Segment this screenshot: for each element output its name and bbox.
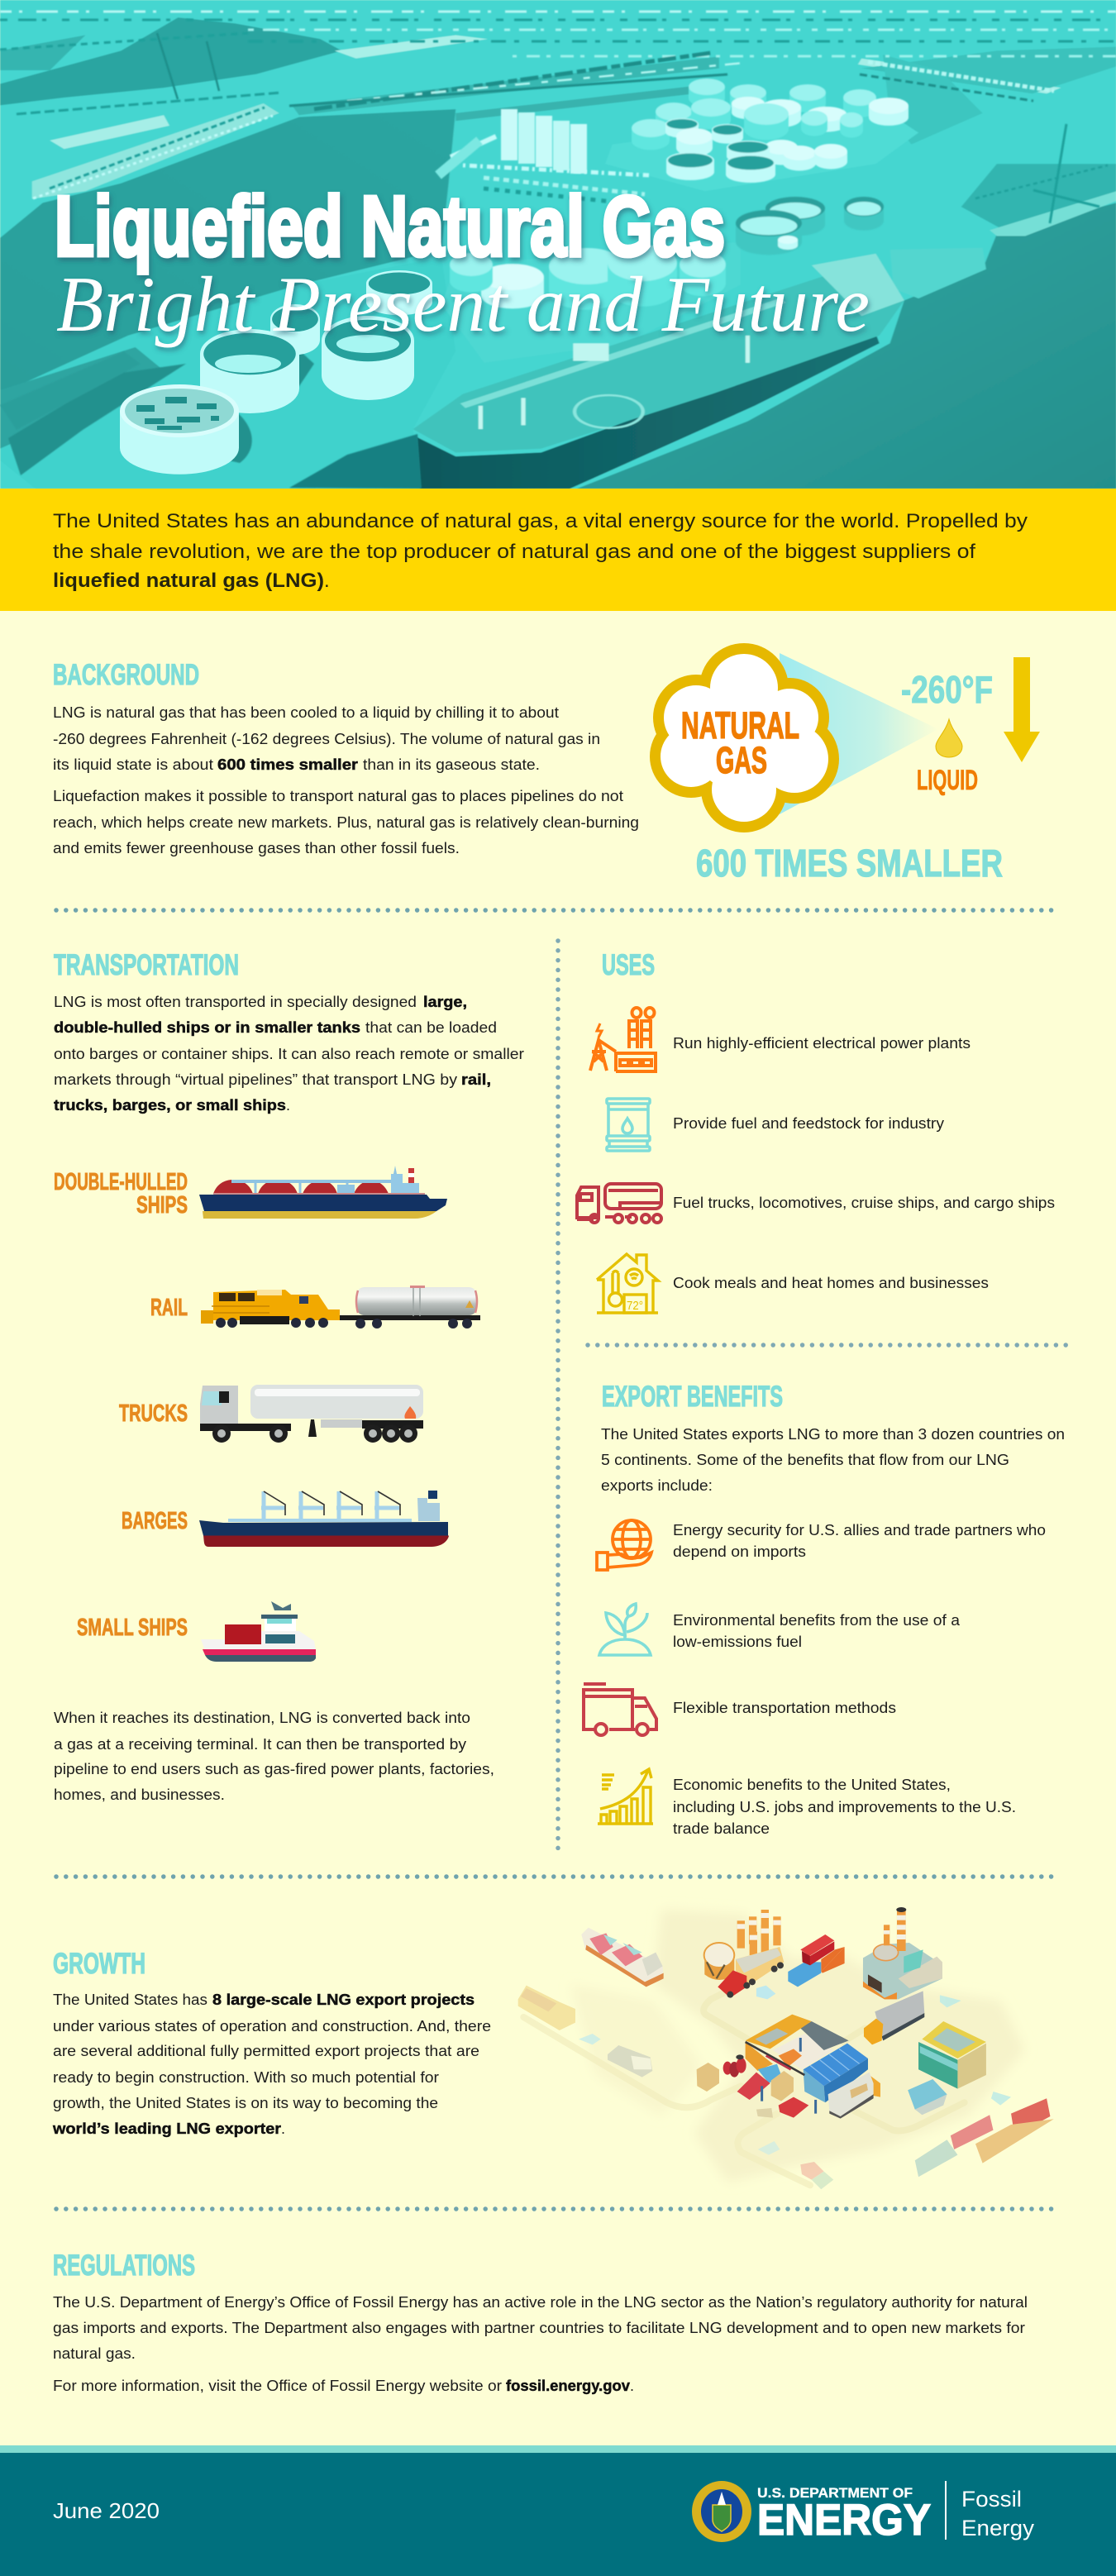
icon: locomotive with tank car — [201, 1286, 480, 1329]
icon: house with thermostat — [597, 1254, 658, 1313]
intro text: . — [324, 570, 330, 592]
growth text: ready to begin construction. With so much potential for — [53, 2069, 439, 2086]
export item text 2: low-emissions fuel — [673, 1634, 802, 1650]
footer — [0, 2445, 1116, 2576]
label: trucks: TRUCKS — [119, 1400, 188, 1427]
transportation text: trucks, barges, or small ships — [54, 1097, 286, 1114]
ice patches right — [940, 1995, 1011, 2106]
transportation text: large, — [423, 994, 467, 1010]
heading: transportation: TRANSPORTATION — [54, 949, 239, 981]
export item text 4: trade balance — [673, 1820, 770, 1837]
transportation text: markets through “virtual pipelines” that transport LNG by — [54, 1071, 457, 1088]
600 times smaller: 600 TIMES SMALLER — [696, 842, 1003, 885]
aerial photo: silos — [501, 109, 587, 174]
pale red truck — [800, 2162, 833, 2189]
subtitle: Bright Present and Future — [56, 260, 870, 348]
transportation text: onto barges or container ships. It can also reach remote or smaller — [54, 1046, 524, 1062]
gas carrier — [581, 1928, 664, 1987]
regulations text: The U.S. Department of Energy’s Office of Fossil Energy has an active role in the LNG sector as the Nation’s regulatory authority for natural — [53, 2294, 1028, 2311]
cloud: natural gas: GAS — [716, 739, 767, 781]
export item text 4 — [673, 1777, 1016, 1837]
aerial photo: shadows — [0, 347, 422, 489]
export intro text — [601, 1426, 1065, 1494]
ice patches — [579, 1986, 780, 2155]
hero: aerial photo of LNG terminal with title — [0, 0, 1116, 489]
growth text: . — [281, 2120, 285, 2137]
aerial photo: land, water, docks — [0, 0, 1116, 489]
grey box truck — [864, 1991, 924, 2044]
background text: reach, which helps create new markets. Plus, natural gas is relatively clean-burning — [53, 814, 639, 831]
export item text 4: including U.S. jobs and improvements to the U.S. — [673, 1799, 1016, 1815]
panel: uses — [577, 949, 1055, 1313]
train — [915, 2098, 1054, 2177]
cloud: natural gas — [650, 643, 839, 832]
export item text 1: Energy security for U.S. allies and trade partners who — [673, 1522, 1046, 1538]
intro text: the shale revolution, we are the top producer of natural gas and one of the biggest suppliers of — [53, 541, 975, 563]
aerial photo: storage tanks lower left — [120, 270, 432, 475]
green building — [918, 2021, 986, 2089]
icon text: 72 degrees: 72° — [627, 1299, 643, 1313]
liquid label: LIQUID — [917, 765, 978, 796]
export item text 2 — [673, 1612, 961, 1650]
icon: liquid drop — [936, 719, 962, 757]
title: Liquefied Natural Gas — [55, 179, 725, 274]
export intro text: 5 continents. Some of the benefits that flow from our LNG — [601, 1452, 1009, 1468]
background text — [53, 704, 639, 856]
icon: small ship — [201, 1601, 316, 1662]
world map background — [570, 1910, 1025, 2182]
roads — [523, 1992, 965, 2185]
isometric LNG export illustration — [518, 1907, 1054, 2189]
growth text: 8 large-scale LNG export projects — [212, 1992, 475, 2008]
uses item text 2: Provide fuel and feedstock for industry — [673, 1115, 944, 1132]
factory — [863, 1907, 942, 1999]
illustration items: center and left — [518, 1907, 942, 2189]
export item text 2: Environmental benefits from the use of a — [673, 1612, 961, 1629]
temperature: -260°F — [901, 668, 993, 711]
intro text — [53, 510, 1028, 592]
intro text: The United States has an abundance of natural gas, a vital energy source for the world. Propelled by — [53, 510, 1028, 532]
icon: tanker truck — [200, 1385, 423, 1443]
destination text — [54, 1710, 494, 1803]
icon: globe in hand — [597, 1520, 651, 1570]
panel: background — [53, 643, 1040, 885]
background text: than in its gaseous state. — [363, 756, 540, 773]
wordmark: u.s. department of: U.S. DEPARTMENT OF — [757, 2485, 913, 2501]
crates, barrels and vehicles — [697, 2038, 816, 2118]
liquefaction diagram — [650, 643, 1040, 885]
regulations text: fossil.energy.gov — [506, 2378, 630, 2394]
growth text: are several additional fully permitted export projects that are — [53, 2043, 479, 2059]
export item text 1: depend on imports — [673, 1543, 806, 1560]
cone — [780, 653, 938, 814]
illustration items: right — [908, 1995, 1054, 2177]
label: double-hulled ships: DOUBLE-HULLED — [54, 1169, 188, 1195]
uses item text 4: Cook meals and heat homes and businesses — [673, 1275, 989, 1291]
destination text: When it reaches its destination, LNG is converted back into — [54, 1710, 470, 1726]
export item text 4: Economic benefits to the United States, — [673, 1777, 951, 1793]
export intro text: exports include: — [601, 1477, 713, 1494]
date: June 2020 — [53, 2498, 160, 2523]
label: barges: BARGES — [122, 1508, 188, 1534]
wordmark: fossil energy: Energy — [961, 2516, 1034, 2540]
icon: plant seedling — [599, 1604, 651, 1655]
icon: department of energy seal — [692, 2481, 751, 2542]
background text: its liquid state is about — [53, 756, 213, 773]
regulations text — [53, 2294, 1028, 2394]
destination text: a gas at a receiving terminal. It can then be transported by — [54, 1736, 466, 1753]
intro text: liquefied natural gas (LNG) — [53, 570, 324, 592]
transportation text: that can be loaded — [365, 1019, 497, 1036]
aerial photo: tank farm — [450, 79, 909, 310]
arrow: down — [1004, 657, 1040, 762]
wordmark: energy: ENERGY — [757, 2496, 931, 2545]
background text: LNG is natural gas that has been cooled to a liquid by chilling it to about — [53, 704, 559, 721]
wordmark: fossil energy: Fossil — [961, 2487, 1022, 2512]
gas spheres and tanker truck — [704, 1910, 784, 1998]
export item text 1 — [673, 1522, 1046, 1560]
aerial photo: city texture, rails and docks — [0, 12, 1116, 223]
background text: -260 degrees Fahrenheit (-162 degrees Celsius). The volume of natural gas in — [53, 731, 600, 747]
label: rail: RAIL — [150, 1295, 188, 1321]
growth text: growth, the United States is on its way to becoming the — [53, 2095, 438, 2111]
background text: and emits fewer greenhouse gases than other fossil fuels. — [53, 840, 460, 856]
icon: tanker truck outline — [577, 1184, 661, 1223]
panel: transportation — [54, 949, 524, 1803]
regulations text: natural gas. — [53, 2345, 136, 2362]
destination text: homes, and businesses. — [54, 1787, 225, 1803]
warehouse — [746, 2015, 868, 2102]
blue truck — [908, 2079, 947, 2115]
growth text: The United States has — [53, 1992, 207, 2008]
growth text: under various states of operation and construction. And, there — [53, 2018, 491, 2035]
icon: growth chart — [598, 1769, 653, 1824]
uses item text 1: Run highly-efficient electrical power plants — [673, 1035, 971, 1052]
heading: growth: GROWTH — [53, 1948, 145, 1980]
transportation text: rail, — [461, 1071, 491, 1088]
icon: barrel — [607, 1099, 650, 1151]
label: double-hulled ships: SHIPS — [136, 1192, 188, 1219]
heading: background: BACKGROUND — [53, 659, 199, 691]
transportation text: LNG is most often transported in specially designed — [54, 994, 417, 1010]
growth text — [52, 1992, 491, 2137]
pale trucks — [518, 1986, 652, 2077]
icon: power plant — [590, 1008, 656, 1071]
export item text 3: Flexible transportation methods — [673, 1700, 896, 1716]
icon: delivery truck — [584, 1684, 656, 1735]
destination text: pipeline to end users such as gas-fired power plants, factories, — [54, 1761, 494, 1777]
panel: export benefits — [584, 1381, 1065, 1837]
shipping containers — [788, 1934, 845, 1987]
white truck — [828, 2073, 880, 2119]
logo divider — [945, 2481, 947, 2540]
wordmark: fossil energy — [961, 2487, 1034, 2540]
regulations text: . — [630, 2378, 634, 2394]
heading: uses: USES — [602, 949, 655, 981]
growth text: world’s leading LNG exporter — [52, 2120, 281, 2137]
export intro text: The United States exports LNG to more than 3 dozen countries on — [601, 1426, 1065, 1443]
background text: 600 times smaller — [217, 756, 358, 773]
cloud: natural gas: NATURAL — [681, 704, 799, 747]
transportation text: . — [286, 1097, 290, 1114]
panel: regulations — [53, 2249, 1028, 2394]
background text: Liquefaction makes it possible to transport natural gas to places pipelines do not — [53, 788, 623, 804]
icon: LNG carrier ship — [199, 1166, 447, 1219]
regulations text: gas imports and exports. The Department also engages with partner countries to facilitate LNG development and to open new markets for — [53, 2320, 1025, 2336]
uses item text 3: Fuel trucks, locomotives, cruise ships, and cargo ships — [673, 1195, 1055, 1211]
transportation text — [54, 994, 524, 1114]
panel: growth — [52, 1907, 1054, 2189]
heading: regulations: REGULATIONS — [53, 2249, 195, 2282]
transportation text: double-hulled ships or in smaller tanks — [54, 1019, 360, 1036]
heading: export benefits: EXPORT BENEFITS — [602, 1381, 783, 1413]
intro band — [0, 489, 1116, 611]
label: small ships: SMALL SHIPS — [77, 1615, 188, 1641]
label: double-hulled ships — [54, 1169, 188, 1219]
icon: cargo barge — [199, 1491, 449, 1547]
regulations text: For more information, visit the Office of Fossil Energy website or — [53, 2378, 502, 2394]
